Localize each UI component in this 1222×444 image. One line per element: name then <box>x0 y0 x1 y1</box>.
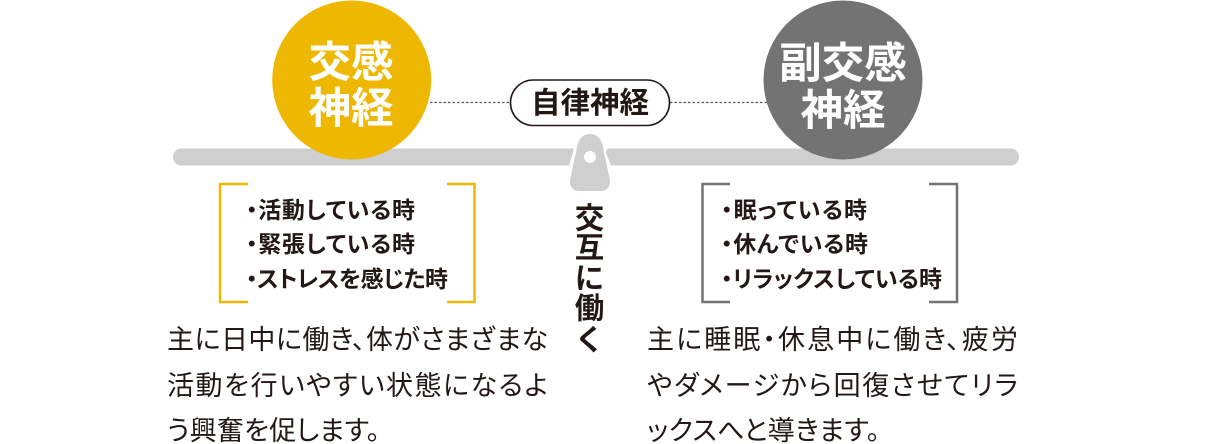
left bracket list: ・ストレスを感じた時 <box>246 266 448 292</box>
right description: 主に睡眠・休息中に働き、疲労 <box>647 325 1018 355</box>
right bracket list: ・リラックスしている時 <box>721 266 942 292</box>
pill label: autonomic nerve: 自律神経 <box>531 87 649 120</box>
right bracket list: ・眠っている時 <box>721 197 867 223</box>
left bracket list <box>220 184 474 302</box>
left description: 主に日中に働き、体がさまざまな <box>167 325 548 355</box>
seesaw beam left <box>173 148 574 166</box>
circle: sympathetic nerve: 交感 <box>308 40 394 87</box>
right bracket list: ・休んでいる時 <box>721 231 868 257</box>
left description: 活動を行いやすい状態になるよ <box>167 371 548 401</box>
circle: sympathetic nerve <box>272 0 431 160</box>
connector: sympathetic to autonomic <box>430 102 510 104</box>
circle: parasympathetic nerve: 神経 <box>800 88 886 135</box>
right description: やダメージから回復させてリラ <box>647 371 1018 401</box>
left bracket list: ・活動している時 <box>246 197 415 223</box>
pill label: autonomic nerve <box>510 80 670 126</box>
circle: parasympathetic nerve: 副交感 <box>779 41 907 88</box>
seesaw fulcrum <box>570 134 610 191</box>
circle: sympathetic nerve: 神経 <box>308 86 394 133</box>
vertical label: alternate working: 交互に働く <box>575 202 604 357</box>
left description <box>167 325 548 444</box>
right bracket list <box>702 184 957 302</box>
left bracket list: ・緊張している時 <box>246 231 415 257</box>
right description <box>647 325 1018 444</box>
circle: parasympathetic nerve <box>764 0 922 160</box>
seesaw beam right <box>606 148 1019 166</box>
connector: autonomic to parasympathetic <box>670 102 768 104</box>
